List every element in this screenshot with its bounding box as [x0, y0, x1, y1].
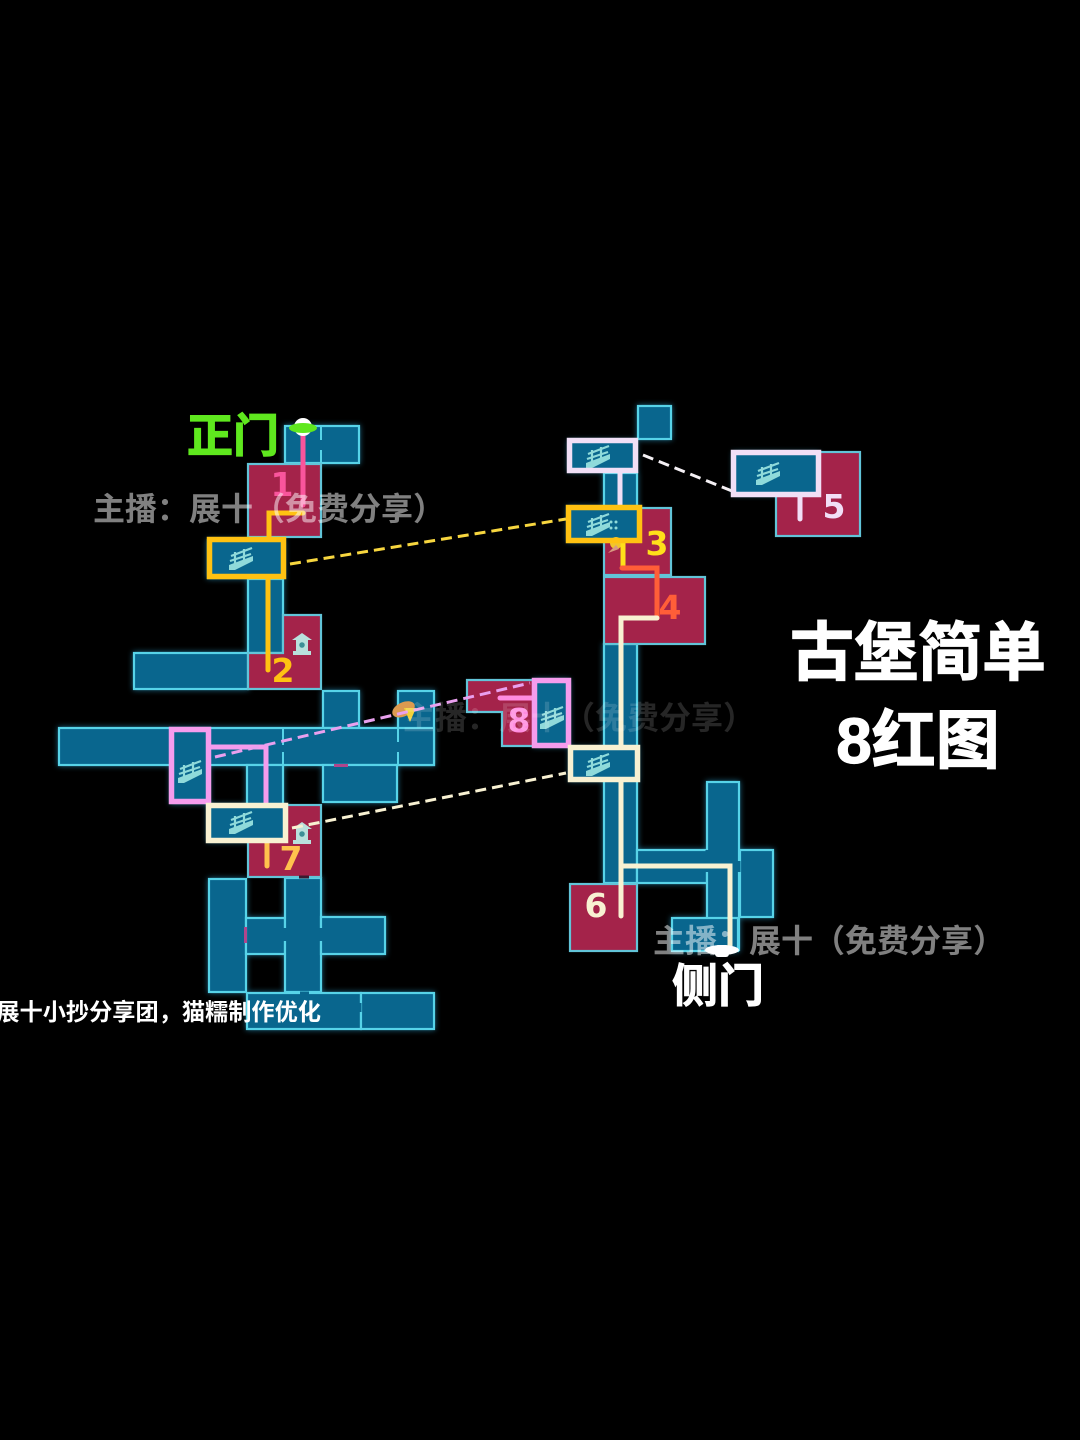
icon: lift G: [540, 707, 564, 729]
icon: main entrance: [289, 418, 317, 436]
doorway gaps in walls: [283, 440, 739, 1012]
icons: lifts: [178, 446, 780, 834]
icon: lift B: [178, 761, 202, 783]
route: amber 7: [264, 843, 270, 866]
title: [790, 617, 1046, 777]
route: yellow 3: [620, 543, 626, 567]
interior wall lines: [283, 426, 398, 1029]
icon: lift A: [229, 548, 253, 570]
lift frame: lilac right: [734, 452, 818, 494]
number 4: 4: [659, 588, 681, 627]
lift rooms redrawn above red rooms: [208, 453, 818, 841]
number 8: 8: [508, 701, 530, 740]
number 1: 1: [271, 465, 293, 504]
panel: left map corridors: [59, 426, 434, 1029]
credit line: 展十小抄分享团，猫糯制作优化: [0, 999, 321, 1025]
dashed link: white: [643, 455, 732, 491]
panel: right red rooms: [467, 452, 860, 951]
number 6: 6: [585, 886, 607, 925]
lift frame: yellow right: [568, 508, 640, 540]
icon: lift F: [756, 463, 780, 485]
dashed link: violet: [215, 683, 530, 757]
lift frame: magenta left: [172, 730, 208, 802]
door markers: [244, 764, 348, 943]
title: 古堡简单: [790, 617, 1046, 689]
number 3: 3: [646, 524, 668, 563]
dashed link: yellow: [290, 519, 566, 564]
icon: statue lower: [292, 822, 312, 844]
lift frame: cream right: [570, 748, 638, 780]
lift frame: magenta right: [534, 680, 568, 746]
title: 8红图: [836, 705, 1000, 777]
watermark: middle: 主播：展十（免费分享）: [403, 700, 755, 736]
dashed link: cream: [292, 773, 566, 828]
dots beside lift: [610, 520, 618, 530]
icon: lift D: [586, 446, 610, 468]
route: orange 4: [622, 568, 657, 618]
route: pink 8: [500, 696, 533, 700]
lift frame: lilac top: [570, 440, 636, 470]
lift frame: yellow left: [210, 540, 284, 576]
watermark: upper left: 主播：展十（免费分享）: [93, 491, 445, 527]
icon: statue upper: [292, 633, 312, 655]
number 2: 2: [272, 651, 294, 690]
number 7: 7: [280, 839, 302, 878]
panel: left red rooms: [248, 464, 321, 877]
icon: lift H: [586, 754, 610, 776]
route: cream 6: [621, 618, 730, 948]
icon: lift E: [586, 514, 610, 536]
icon: yellow pin: [608, 537, 622, 553]
route: magenta 8: [211, 747, 266, 803]
route: pink 1: [300, 432, 306, 505]
watermark: lower right: 主播：展十（免费分享）: [653, 923, 1005, 959]
route: yellow 2: [268, 513, 303, 670]
label: side gate: 侧门: [672, 960, 764, 1012]
panel: right map corridors: [534, 406, 818, 951]
route: pale lilac 5: [620, 473, 800, 519]
icon: hat character: [390, 698, 417, 722]
icon: side entrance: [705, 945, 739, 957]
number 5: 5: [823, 487, 845, 526]
icon: lift C: [229, 812, 253, 834]
label: main gate: 正门: [187, 410, 279, 462]
lift frame: cream left: [208, 806, 286, 840]
